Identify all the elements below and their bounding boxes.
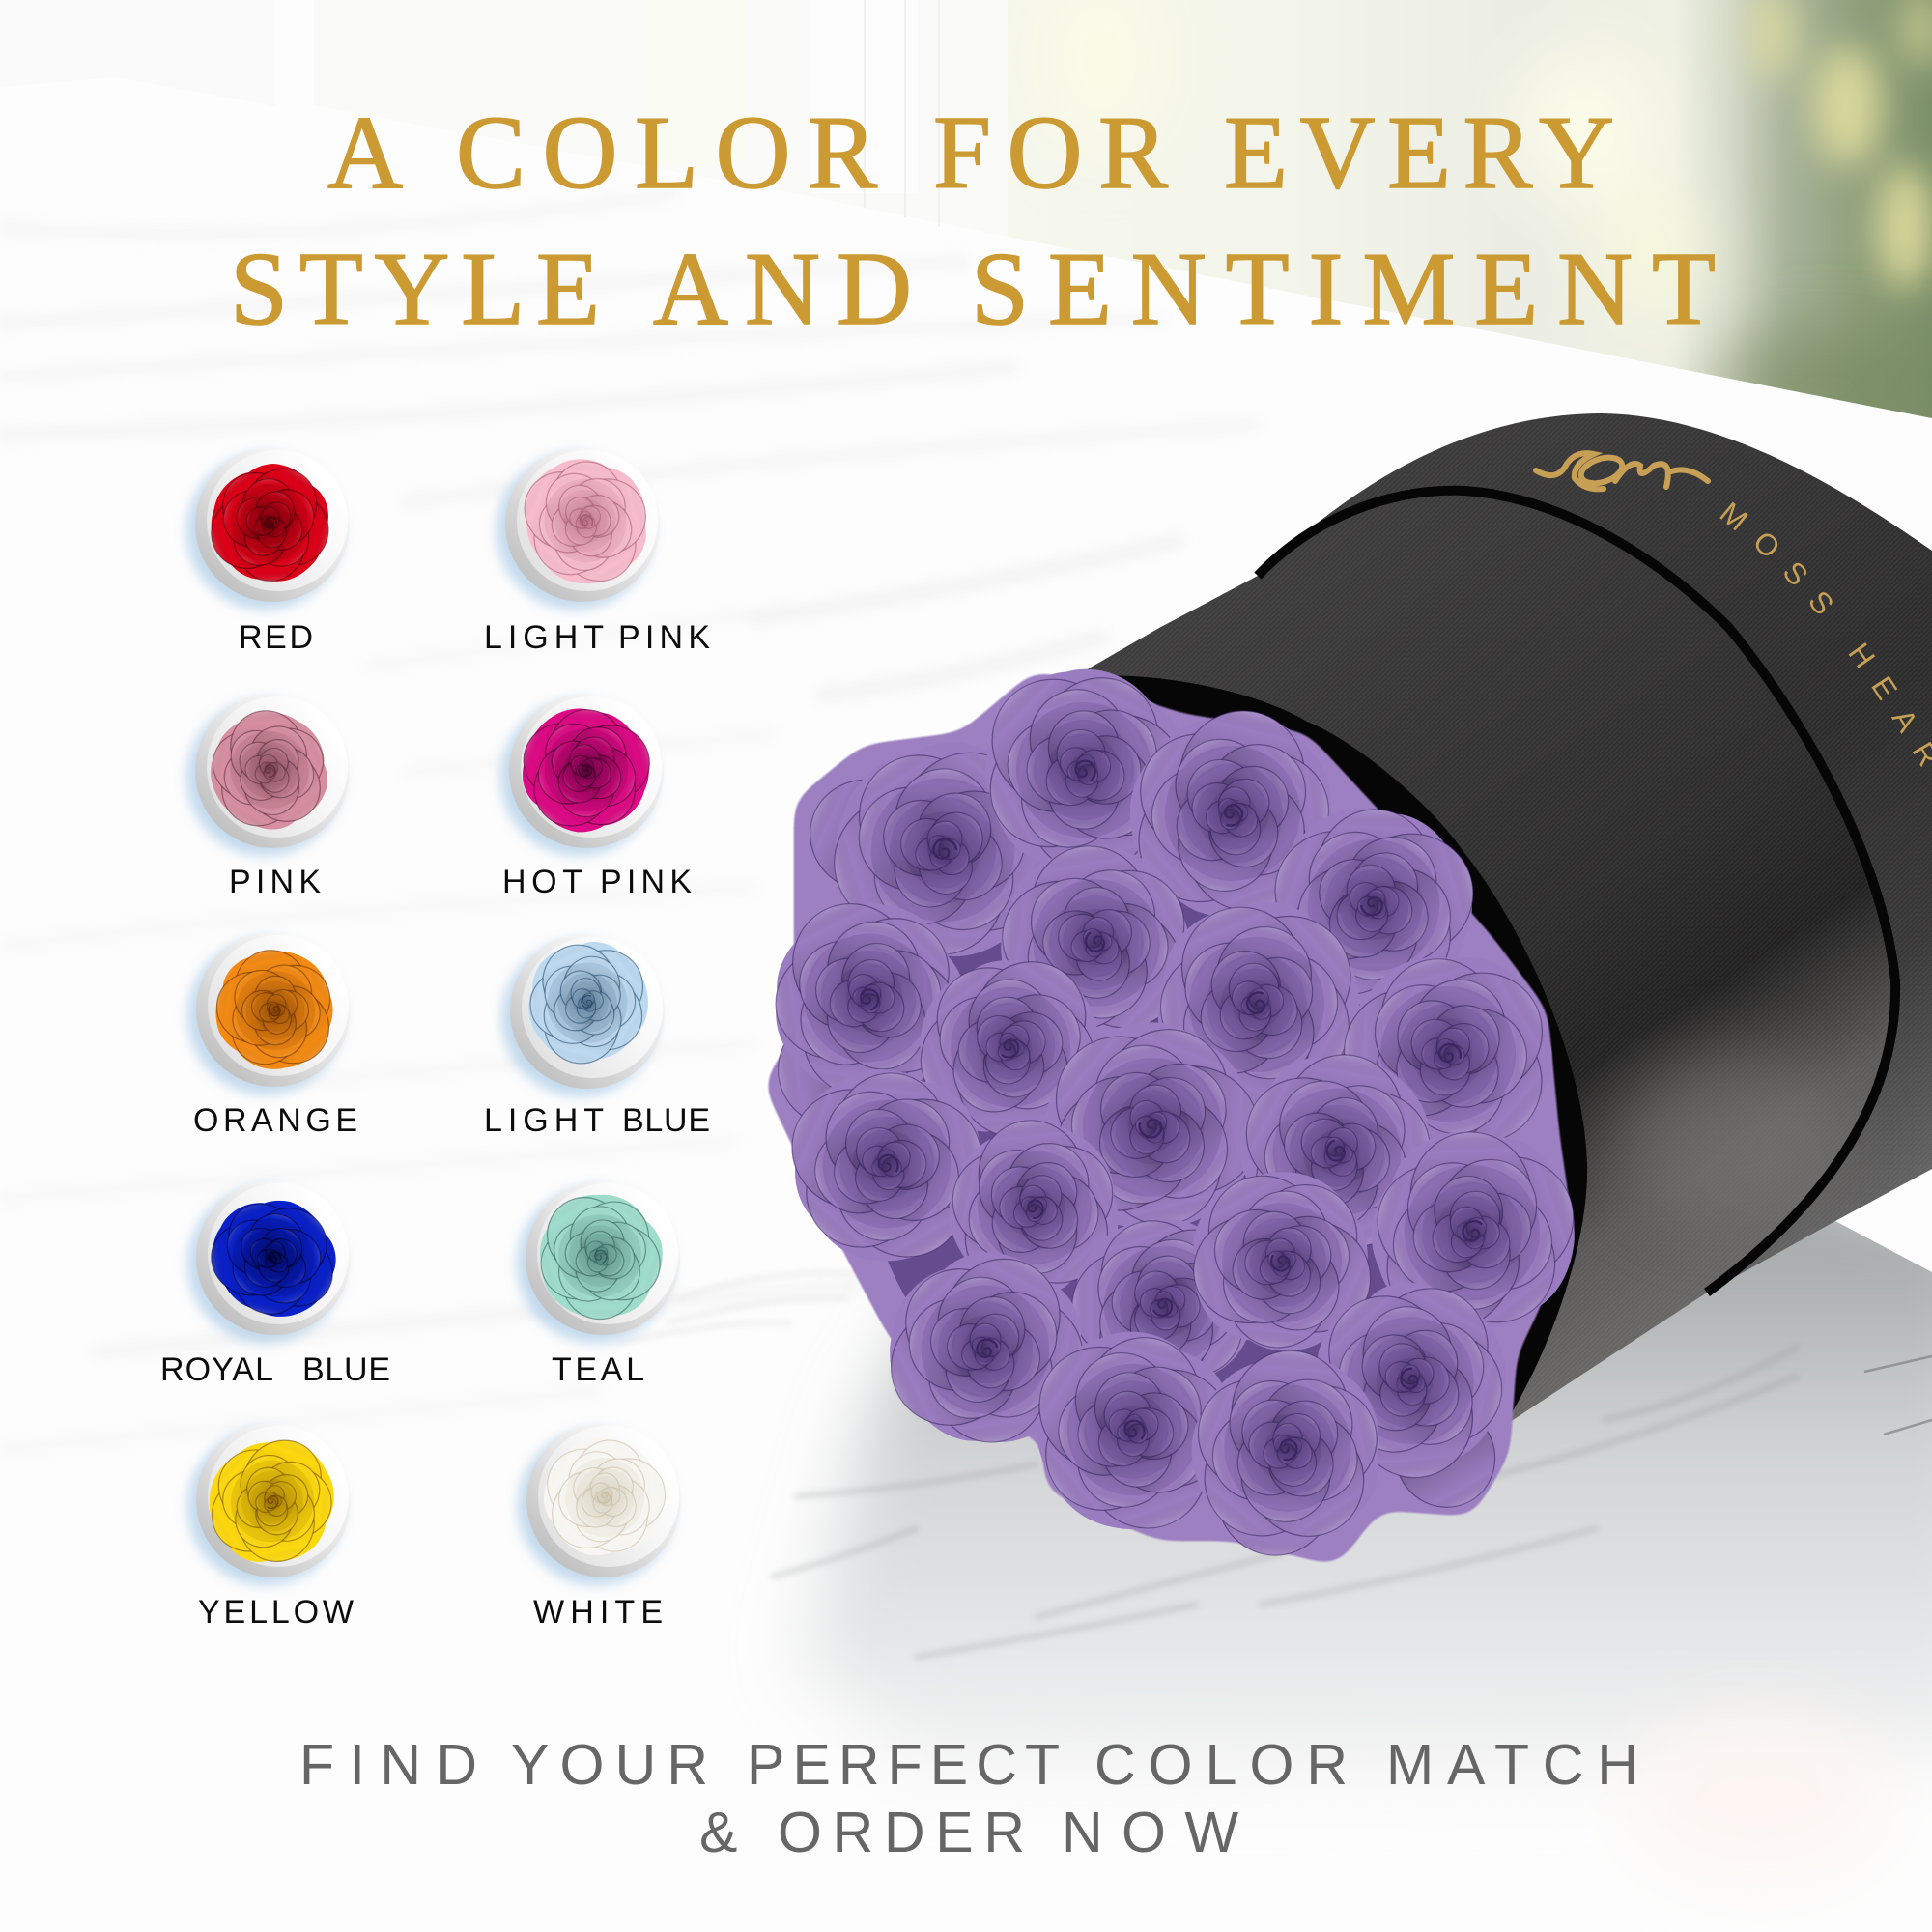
- swatch: hot pink: PINK: [600, 864, 692, 900]
- icon: light pink rose: [490, 422, 677, 610]
- swatch: orange: [187, 932, 357, 1139]
- call to action: ORDER: [778, 1801, 1025, 1864]
- box body: [1088, 576, 1890, 1421]
- title: heading: EVERY: [1224, 96, 1614, 211]
- call to action: COLOR: [1094, 1733, 1348, 1797]
- icon: yellow rose: [184, 1406, 371, 1593]
- icon: light blue rose: [489, 911, 677, 1099]
- swatch: light blue: BLUE: [622, 1102, 710, 1139]
- call to action: &: [699, 1801, 737, 1864]
- shadow and veins on marble floor: [771, 1221, 1932, 1842]
- icon: hot pink rose: [502, 684, 680, 861]
- swatch: hot pink: [500, 684, 692, 900]
- swatch: white: [518, 1410, 698, 1631]
- swatch: light blue: LIGHT: [484, 1102, 604, 1139]
- brand logo: gold monogram: [1536, 453, 1708, 489]
- call to action: [299, 1733, 1638, 1864]
- icon: white rose: [519, 1410, 698, 1590]
- swatch: red: RED: [239, 619, 313, 656]
- swatch: light pink: LIGHT: [484, 619, 604, 656]
- title: heading: AND: [653, 232, 912, 347]
- icon: pink rose: [184, 678, 361, 854]
- lid seam: [1258, 491, 1895, 1293]
- call to action: MATCH: [1386, 1733, 1638, 1797]
- icon: royal blue rose: [178, 1165, 360, 1344]
- swatch: royal blue: BLUE: [302, 1351, 390, 1388]
- swatch: light blue: [484, 911, 710, 1139]
- swatch: royal blue: ROYAL: [160, 1351, 273, 1388]
- title: heading: A: [327, 96, 403, 211]
- icon: red rose: [185, 441, 345, 602]
- icon: orange rose: [199, 940, 352, 1092]
- box opening rim: [1063, 675, 1587, 1449]
- swatch: orange: ORANGE: [193, 1102, 357, 1139]
- title: heading: STYLE: [230, 232, 600, 347]
- swatch: pink: [184, 678, 361, 900]
- title: heading: COLOR: [456, 96, 877, 211]
- swatch: yellow: [184, 1406, 371, 1631]
- bouquet base: [764, 671, 1571, 1565]
- swatch: teal: TEAL: [552, 1351, 644, 1388]
- black hat box with lid: [1063, 413, 1932, 1449]
- swatch: white: WHITE: [533, 1594, 663, 1631]
- swatch: red: [185, 441, 350, 656]
- title: heading: FOR: [933, 96, 1168, 211]
- swatch: royal blue: [160, 1165, 390, 1388]
- purple rose bouquet: [738, 632, 1607, 1591]
- call to action: PERFECT: [747, 1733, 1060, 1797]
- swatch: light pink: [484, 422, 710, 656]
- call to action: FIND: [299, 1733, 477, 1797]
- swatch: yellow: YELLOW: [198, 1594, 354, 1631]
- call to action: NOW: [1062, 1801, 1238, 1864]
- roses: [738, 632, 1607, 1591]
- swatch: light pink: PINK: [618, 619, 710, 656]
- background: blurred window and garden scene: [1008, 0, 1932, 444]
- swatch: hot pink: HOT: [502, 864, 582, 900]
- guard petals: [769, 761, 1583, 1555]
- title: heading: SENTIMENT: [971, 232, 1716, 347]
- swatch: pink: PINK: [229, 864, 321, 900]
- title: heading: [230, 96, 1716, 347]
- icon: teal rose: [531, 1182, 669, 1320]
- box lid: [1258, 413, 1932, 1293]
- swatch: teal: [517, 1180, 680, 1388]
- call to action: YOUR: [511, 1733, 708, 1797]
